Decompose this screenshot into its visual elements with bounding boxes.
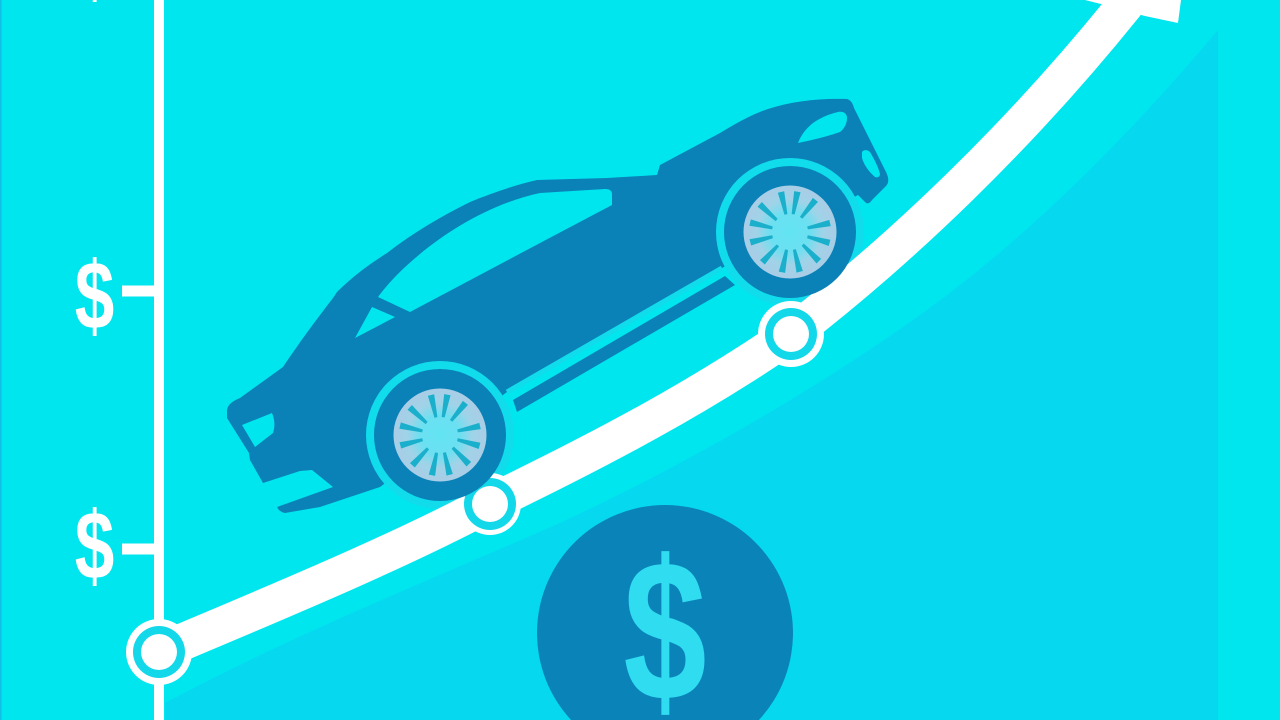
rising curve arrow [159,0,1181,652]
sill highlight [507,268,722,392]
upper point marker [758,301,824,367]
front wheel [724,166,856,298]
left edge line [0,0,2,720]
axis label: middle dollar: $ [75,241,114,349]
axis label: lower dollar: $ [75,491,114,599]
middle point marker [459,473,521,535]
wheel arch ring: front [716,158,864,306]
axis: vertical price axis [122,0,164,720]
area under the curve [165,30,1218,720]
car lower sill [513,276,735,412]
coin: dollar [537,505,793,720]
wheel arch ring: rear [366,361,514,509]
rear wheel [374,369,506,501]
car body [227,99,888,513]
start point marker [126,619,192,685]
